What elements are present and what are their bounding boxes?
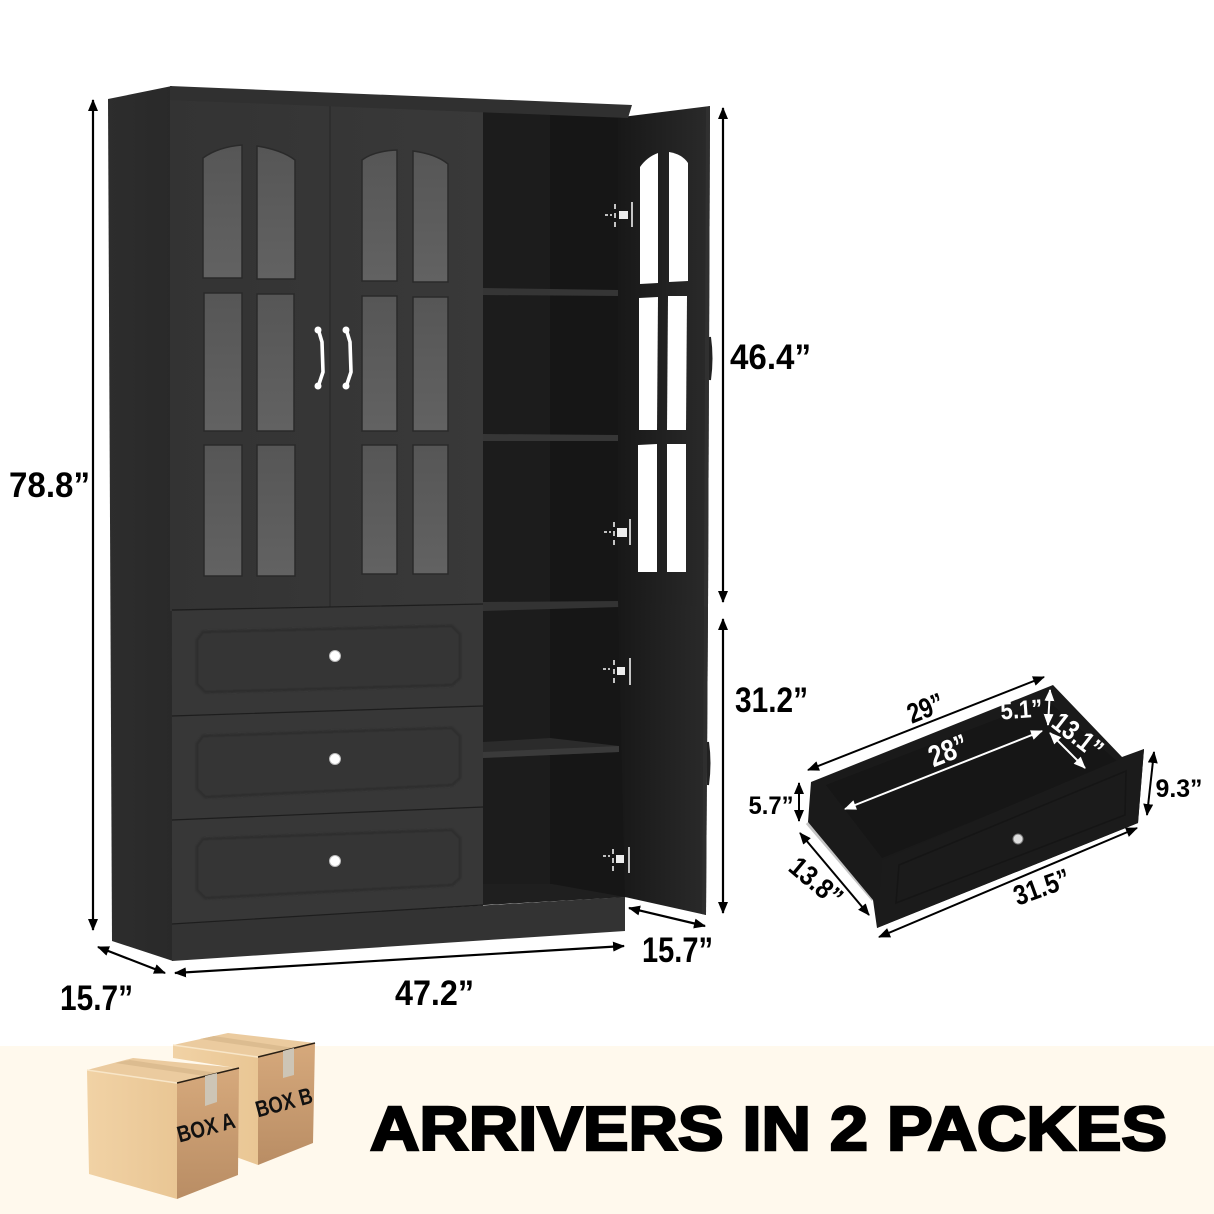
drawer detail illustration <box>807 685 1144 928</box>
drawer dimension labels <box>748 687 1202 913</box>
glass panes: right door <box>362 150 448 574</box>
drawer knobs <box>330 650 340 866</box>
13.1 inch label: 13.1” <box>1046 706 1109 765</box>
lower section label: 31.2” <box>735 681 808 720</box>
9.3 inch label: 9.3” <box>1156 775 1202 803</box>
glass doors <box>170 98 483 611</box>
door width label: 15.7” <box>642 931 713 970</box>
5.1 inch label: 5.1” <box>1000 695 1043 725</box>
drawer front panel <box>877 749 1144 928</box>
drawer body <box>808 685 1144 928</box>
upper section label: 46.4” <box>730 338 811 377</box>
drawer dimension arrows <box>799 677 1154 937</box>
banner headline: ARRIVERS IN 2 PACKES <box>370 1095 1167 1164</box>
31.5 inch label: 31.5” <box>1009 863 1074 912</box>
13.8 inch label: 13.8” <box>783 851 849 913</box>
box A label: BOX A <box>174 1107 238 1147</box>
cabinet illustration <box>108 86 712 961</box>
width label: 47.2” <box>395 974 474 1013</box>
drawer recessed panels <box>197 626 460 898</box>
cabinet side panel <box>108 86 173 961</box>
drawer light edge <box>807 823 873 900</box>
28 inch label: 28” <box>924 728 973 774</box>
box A <box>87 1058 239 1199</box>
bottom banner <box>0 1033 1214 1214</box>
cabinet dimension labels <box>9 338 811 1018</box>
cornice top trim <box>170 86 632 118</box>
cabinet base plinth <box>172 897 625 961</box>
cabinet dimension arrows <box>93 100 723 973</box>
glass panes: left door <box>203 145 295 576</box>
three drawers <box>172 604 483 925</box>
box B label: BOX B <box>253 1082 315 1122</box>
depth label left: 15.7” <box>60 979 133 1018</box>
drawer inside floor <box>826 700 1118 858</box>
door hinges <box>603 202 632 873</box>
height label: 78.8” <box>9 466 90 505</box>
box B <box>173 1033 315 1165</box>
banner background <box>0 1046 1214 1214</box>
29 inch label: 29” <box>902 687 948 729</box>
5.7 inch label: 5.7” <box>748 792 794 820</box>
door handles <box>314 326 351 390</box>
open door lower panel <box>618 601 710 915</box>
open door upper with windows <box>618 106 712 609</box>
open interior with shelves <box>483 110 628 905</box>
front carcass underlay <box>170 90 484 926</box>
drawer knob <box>1013 834 1023 844</box>
